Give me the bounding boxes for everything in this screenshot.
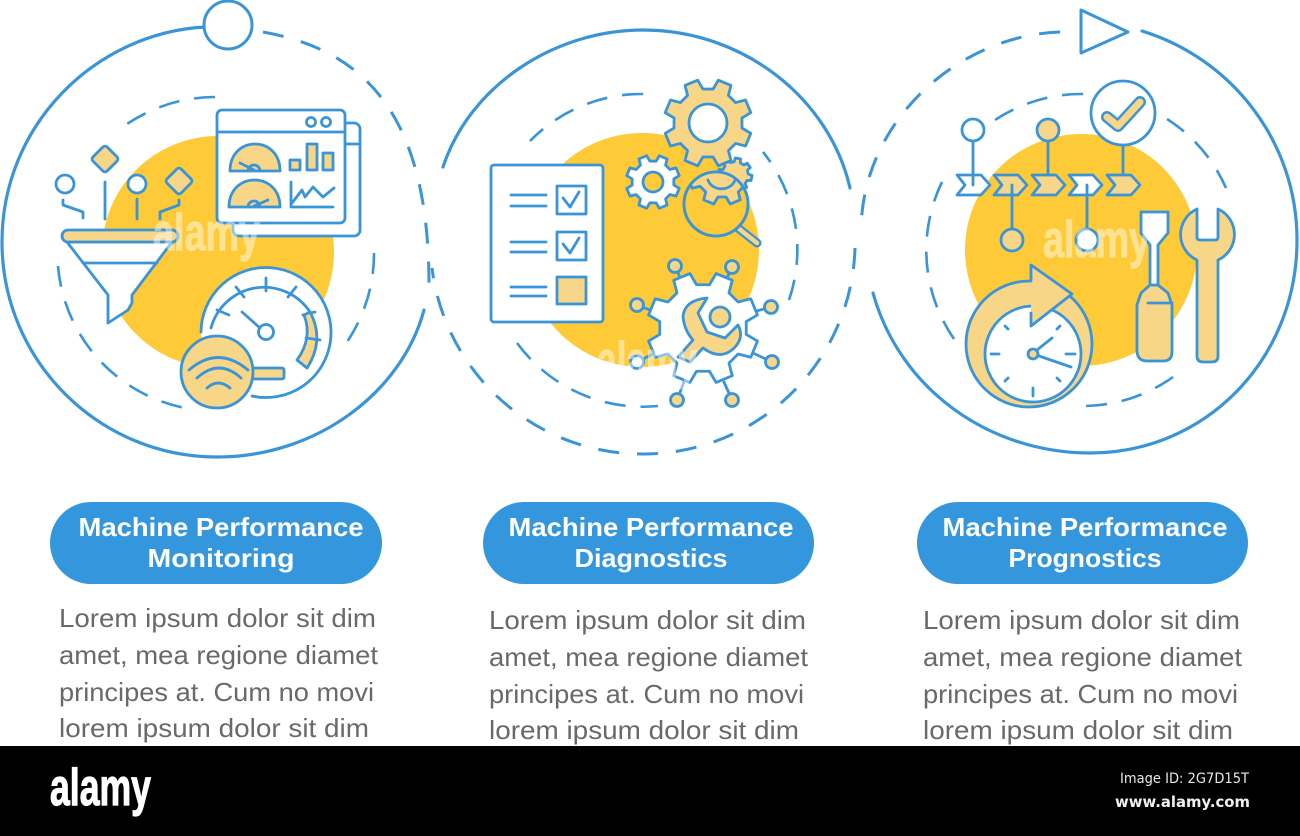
icon: process timeline bbox=[957, 81, 1155, 251]
outer ring bbox=[432, 30, 855, 454]
icon: wrench in gear with nodes bbox=[630, 256, 778, 406]
body text: monitoring: lorem ipsum dolor sit dim bbox=[59, 713, 369, 743]
body text: monitoring bbox=[59, 603, 379, 743]
pill heading: prognostics bbox=[917, 502, 1248, 584]
pill heading: monitoring: Monitoring bbox=[148, 543, 294, 573]
icon: dashboard window bbox=[217, 110, 360, 236]
body text: prognostics: lorem ipsum dolor sit dim bbox=[923, 715, 1233, 745]
icon: clock with arrow bbox=[966, 265, 1092, 407]
panel: machine performance monitoring bbox=[2, 1, 429, 457]
watermark: alamy bbox=[153, 204, 260, 262]
body text: diagnostics bbox=[489, 605, 809, 745]
body text: monitoring: principes at. Cum no movi bbox=[59, 677, 374, 707]
pill heading: diagnostics bbox=[483, 502, 814, 584]
body text: diagnostics: amet, mea regione diamet bbox=[489, 642, 809, 672]
icon: large gear bbox=[651, 66, 765, 194]
panel: machine performance diagnostics bbox=[432, 30, 855, 454]
body text: diagnostics: Lorem ipsum dolor sit dim bbox=[489, 605, 806, 635]
yellow background circle bbox=[525, 133, 759, 367]
footer logo: alamy bbox=[50, 759, 151, 817]
inner dashed ring bbox=[926, 94, 1226, 406]
outer ring bbox=[2, 27, 429, 457]
body text: prognostics bbox=[923, 605, 1243, 745]
body text: monitoring: Lorem ipsum dolor sit dim bbox=[59, 603, 376, 633]
yellow background circle bbox=[102, 136, 334, 368]
footer bar bbox=[0, 746, 1300, 836]
pill heading: diagnostics: Diagnostics bbox=[574, 543, 728, 573]
inner dashed ring bbox=[517, 94, 797, 407]
body text: diagnostics: principes at. Cum no movi bbox=[489, 679, 804, 709]
inner dashed ring bbox=[58, 97, 374, 408]
pill heading: prognostics: Machine Performance bbox=[942, 512, 1228, 542]
ring marker: circle bbox=[204, 1, 252, 49]
icon: screwdriver bbox=[1137, 212, 1172, 361]
outer ring bbox=[861, 31, 1297, 453]
image id: Image ID: 2G7D15T bbox=[1120, 771, 1249, 787]
icon: magnifier bbox=[682, 170, 762, 248]
icon: checklist bbox=[491, 165, 603, 322]
pill heading: prognostics: Prognostics bbox=[1008, 543, 1162, 573]
icon: speedometer with wifi bbox=[181, 267, 331, 408]
body text: diagnostics: lorem ipsum dolor sit dim bbox=[489, 715, 799, 745]
body text: monitoring: amet, mea regione diamet bbox=[59, 640, 379, 670]
icon: data funnel bbox=[56, 145, 193, 323]
pill heading: monitoring: Machine Performance bbox=[78, 512, 364, 542]
icon: small gear bbox=[618, 147, 688, 217]
watermark: alamy bbox=[597, 332, 697, 390]
ring marker: triangle bbox=[1081, 10, 1128, 53]
body text: prognostics: amet, mea regione diamet bbox=[923, 642, 1243, 672]
body text: prognostics: principes at. Cum no movi bbox=[923, 679, 1238, 709]
pill heading: monitoring bbox=[50, 502, 382, 584]
icon: wrench bbox=[1181, 209, 1234, 362]
panel: machine performance prognostics bbox=[861, 10, 1297, 453]
yellow background circle bbox=[965, 134, 1197, 366]
body text: prognostics: Lorem ipsum dolor sit dim bbox=[923, 605, 1240, 635]
watermark: alamy bbox=[1043, 211, 1150, 269]
website: www.alamy.com bbox=[1115, 793, 1250, 811]
pill heading: diagnostics: Machine Performance bbox=[508, 512, 794, 542]
